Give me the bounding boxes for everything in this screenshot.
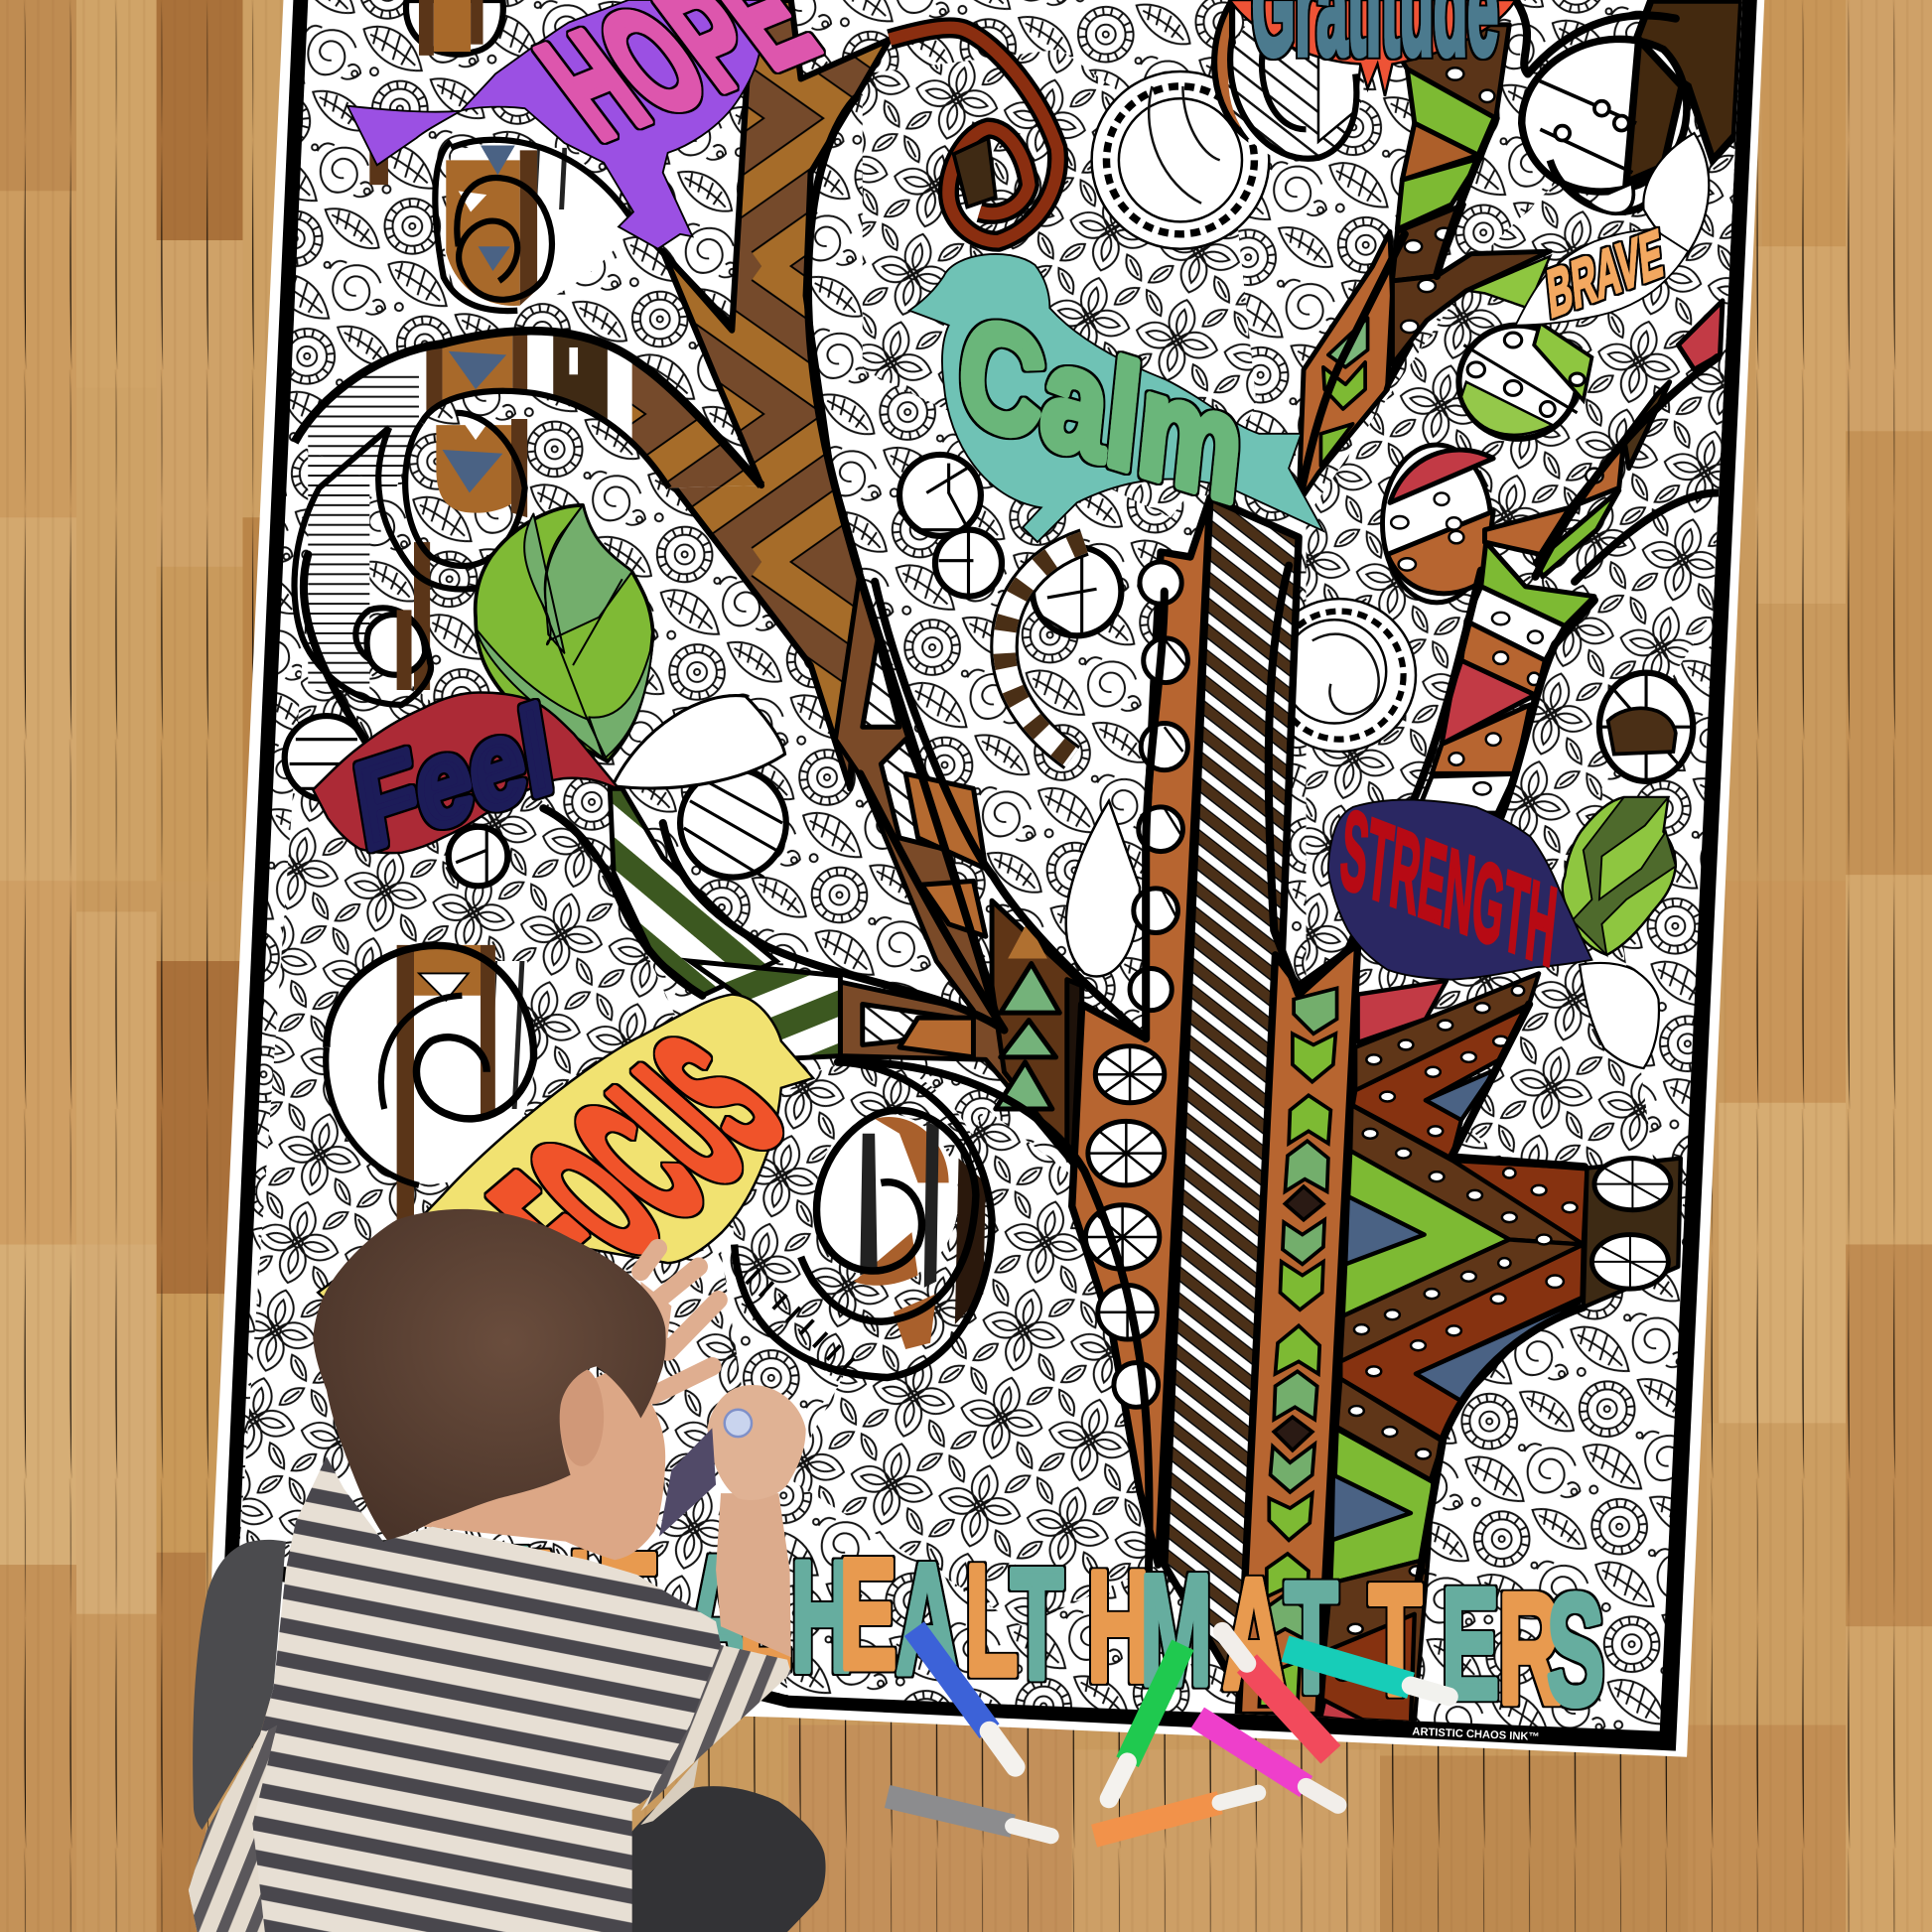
bird: Calm: Calm (952, 283, 1250, 535)
shirt: sleeve (640, 1645, 791, 1811)
word leaf: Strength: STRENGTH (1335, 784, 1562, 991)
doodle: plain medallions (1066, 71, 1416, 976)
marker: magenta (1197, 1718, 1338, 1805)
shirt: lower left folds (189, 1725, 277, 1932)
branch: lower right dotted zigzag (1318, 973, 1681, 1723)
brand credit: ARTISTIC CHAOS INK™ (1412, 1725, 1540, 1743)
pants: knee (193, 1540, 286, 1830)
bird: Hope (347, 0, 845, 249)
swirl: top centre red loop (890, 28, 1058, 241)
branch: main trunk with hatching (1072, 497, 1358, 1716)
leaf: white leaf under Strength (1580, 963, 1659, 1068)
word leaf: Feel: Feel (347, 681, 560, 876)
branch: top right coloured band (1299, 25, 1550, 502)
marker in hand (725, 1410, 752, 1437)
word leaf: Brave: BRAVE (1544, 215, 1666, 333)
swirl: upper left brown (369, 123, 732, 326)
top left small swirl (406, 0, 503, 56)
leaf: dark green striped leaf (1563, 797, 1676, 955)
swirl: lower left (324, 945, 534, 1220)
poster sheet (211, 0, 1765, 1757)
dark drawn patch (659, 1428, 716, 1537)
lower right white dots and rosettes (1335, 986, 1671, 1681)
branch: descending limb (835, 572, 1084, 1172)
swirl: right of Brave (1458, 323, 1591, 439)
swirl: lower arch with triangles (295, 391, 669, 705)
striped arc (1004, 542, 1084, 758)
markers (888, 1629, 1449, 1836)
hair (313, 1209, 666, 1542)
arch band with triangles (306, 336, 757, 488)
marker: green (1109, 1645, 1182, 1799)
hashtag slogan: MENTALHEALTHMATTERS (434, 1516, 1604, 1738)
marker: blue (914, 1629, 1016, 1767)
top right swirl with leaves (1522, 0, 1742, 213)
undershirt (640, 1758, 699, 1825)
branch: right multicolour band (1382, 301, 1723, 813)
marker: teal (1285, 1649, 1449, 1697)
small swirls near the bird (285, 455, 1693, 886)
bird: Calm (909, 254, 1323, 542)
pants: lower leg (628, 1786, 826, 1932)
swirl: top hatch circle (1214, 0, 1368, 162)
branch: upper brown zigzag limb (633, 0, 890, 788)
leaf: green leaf upper left (476, 505, 653, 761)
face and neck (424, 1368, 665, 1560)
leaf: white leaf beside Feel (613, 696, 785, 788)
bold paisley outlines (304, 0, 1718, 1589)
shirt: torso (189, 1456, 740, 1932)
marker: red (1222, 1631, 1330, 1754)
word leaf: Feel (313, 681, 620, 876)
child (189, 1209, 826, 1932)
marker: orange (1094, 1793, 1258, 1836)
trunk: green chevrons (1259, 988, 1337, 1707)
leaf: white leaf top right (1643, 133, 1709, 256)
word leaf: top banner with Gratitude text (1230, 0, 1516, 96)
leaf: green behind Brave (1468, 256, 1550, 308)
ear (559, 1368, 604, 1466)
arm and hand (640, 1248, 806, 1657)
bird: Focus: FOCUS (453, 1002, 823, 1322)
panel: doodle artwork area (239, 0, 1742, 1731)
branch: lower left green striped limb (610, 788, 840, 1059)
marker: gray (888, 1796, 1051, 1836)
swirl: lower centre (733, 1062, 992, 1378)
trunk: white rosettes (1085, 562, 1187, 1407)
